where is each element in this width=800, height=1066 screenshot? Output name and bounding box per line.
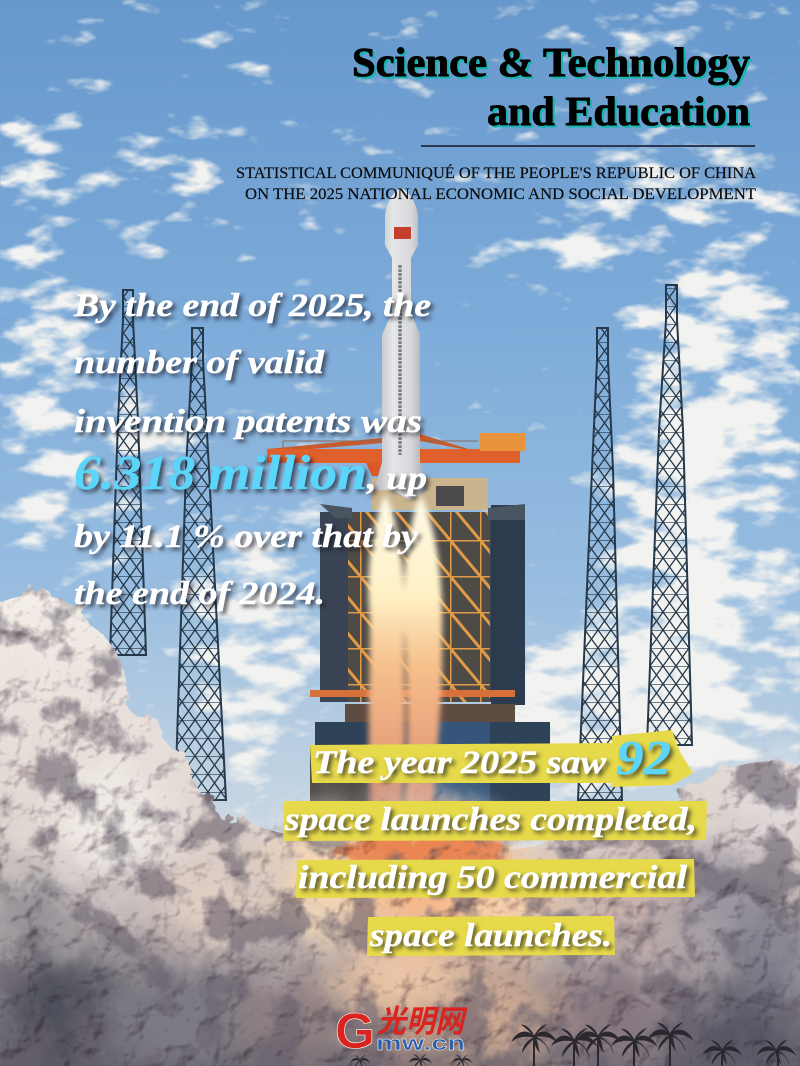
launch pad building	[310, 478, 550, 832]
figure patch	[612, 730, 693, 787]
tower right	[578, 328, 622, 800]
palm trees	[350, 1022, 796, 1066]
title rule	[421, 145, 755, 147]
patent statistic text: invention patents was	[74, 404, 422, 440]
patent statistic text: number of valid	[74, 345, 325, 381]
logo letter G: G	[335, 1003, 375, 1059]
title	[352, 39, 751, 134]
rocket	[374, 188, 428, 500]
title: Science & Technology	[352, 39, 751, 85]
subtitle	[236, 163, 756, 203]
ladder	[398, 265, 402, 455]
launches statistic text: including 50 commercial	[298, 860, 688, 896]
patent statistic text: by 11.1 % over that by	[74, 519, 418, 555]
canopy	[320, 504, 525, 520]
tower far left	[110, 290, 146, 655]
patent statistic text: the end of 2024.	[74, 576, 325, 612]
sky clouds	[0, 0, 800, 790]
orange box	[480, 433, 525, 451]
subtitle: ON THE 2025 NATIONAL ECONOMIC AND SOCIAL DEVELOPMENT	[245, 186, 756, 203]
dark side blocks	[320, 512, 525, 702]
patent statistic text	[73, 288, 431, 612]
rocket gantry arm	[267, 433, 525, 476]
title: and Education	[487, 88, 750, 134]
upper cabin	[372, 478, 488, 510]
launch towers	[110, 285, 692, 800]
scaffolding	[348, 512, 490, 702]
logo domain: mw.cn	[376, 1033, 465, 1055]
launches statistic text: space launches completed,	[284, 802, 697, 838]
subtitle: STATISTICAL COMMUNIQUÉ OF THE PEOPLE'S REPUBLIC OF CHINA	[236, 163, 756, 182]
fire glow	[340, 830, 510, 874]
launches statistic text: space launches.	[369, 918, 612, 954]
billowing cloud bank	[0, 595, 800, 1066]
colour map of shaded and sunlit cloud	[0, 760, 800, 1066]
logo: gmw.cn	[335, 1003, 468, 1059]
launches statistic text: The year 2025 saw	[313, 745, 607, 781]
tower far right	[647, 285, 692, 745]
launches statistic text	[284, 730, 697, 954]
patent statistic text: By the end of 2025, the	[73, 288, 431, 324]
figure 92: 92	[616, 730, 671, 785]
launches highlight bars	[283, 730, 707, 956]
flag on fairing	[394, 227, 411, 239]
engine flames	[368, 494, 442, 835]
patent statistic text: , up	[366, 461, 427, 497]
lower block	[315, 722, 550, 832]
highlighted figure: 6.318 million	[74, 445, 367, 500]
tower left	[175, 328, 226, 800]
logo Chinese name: 光明网	[377, 1004, 468, 1039]
